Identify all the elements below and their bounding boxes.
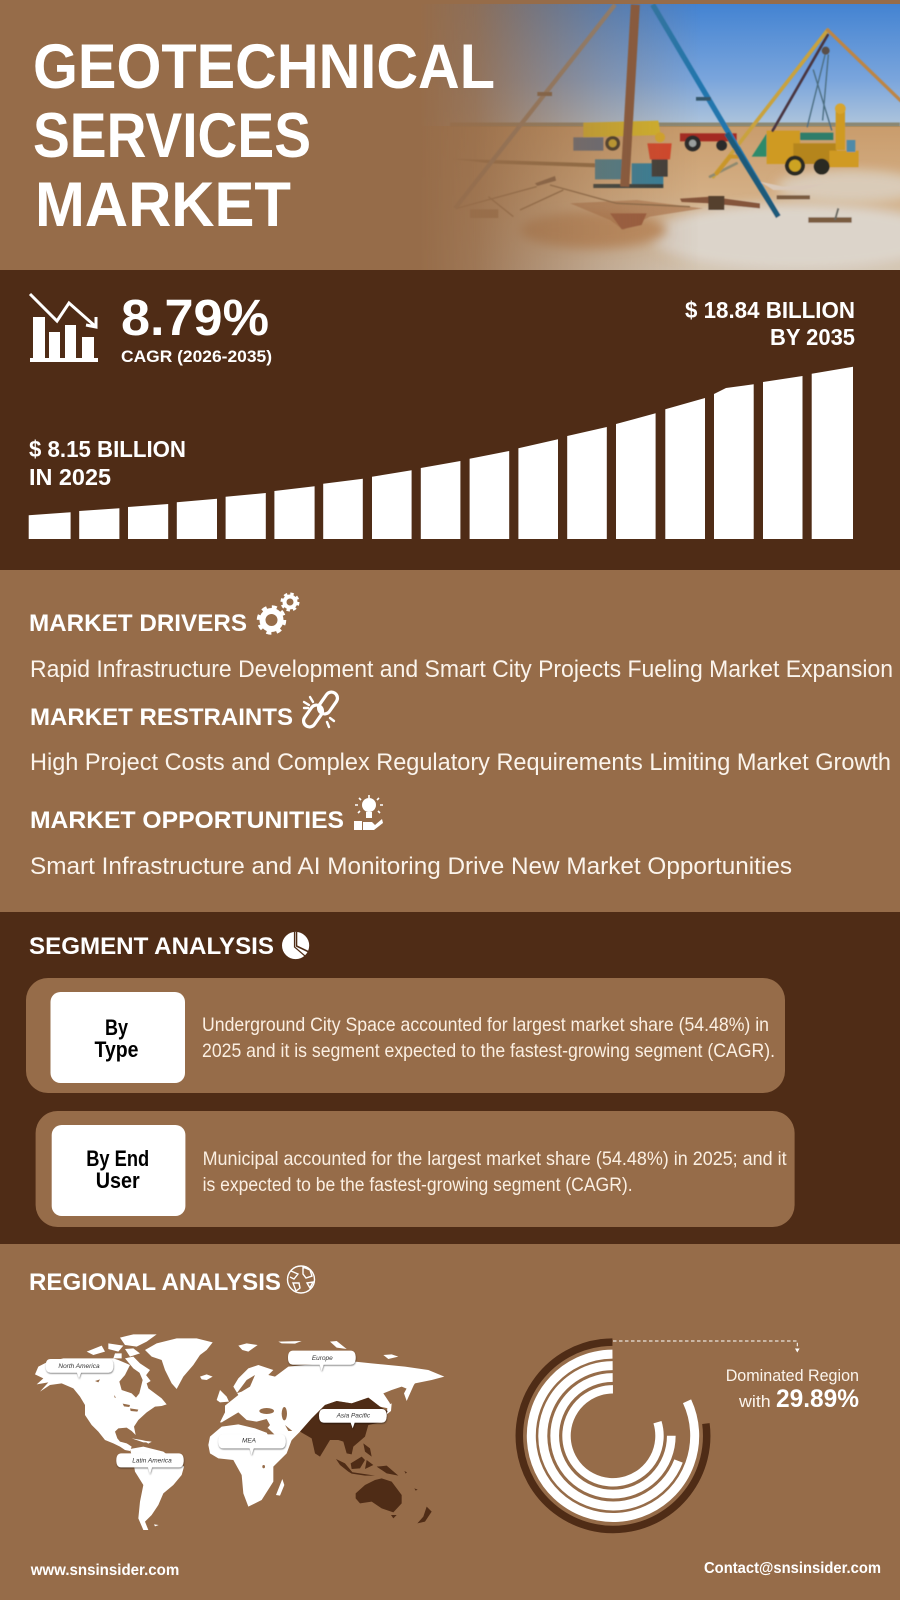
main poles [476, 4, 617, 183]
panel: segment analysis [0, 912, 900, 1244]
tractor [680, 133, 737, 141]
text: restraint: High Project Costs and Complex Regulatory Requirements Limiting Market Growth [30, 749, 891, 776]
2025 value [29, 436, 186, 490]
label box: by end user [52, 1125, 185, 1216]
title [33, 32, 495, 240]
callout: north america: North America [58, 1363, 100, 1370]
callout: dominated region: Dominated Region [726, 1366, 859, 1385]
label box: by end user: By End [86, 1146, 149, 1171]
icon: broken chain [301, 690, 340, 729]
callout: dominated region [726, 1366, 859, 1413]
2035 value [685, 297, 855, 350]
photo: drilling rigs on a dry site [400, 4, 900, 270]
callout: latin america [116, 1453, 184, 1474]
icon: growth chart [30, 294, 98, 362]
2035 value: BY 2035 [770, 324, 855, 350]
label box: by end user: User [96, 1168, 140, 1193]
pump [595, 159, 625, 179]
2025 value: IN 2025 [29, 464, 111, 490]
drilling machine [752, 133, 767, 157]
icon: idea in hand [354, 795, 383, 830]
panel: regional analysis [29, 1266, 881, 1579]
map: great lakes [95, 1379, 138, 1412]
map: inland seas [222, 1375, 292, 1468]
callout: mea: MEA [242, 1438, 256, 1445]
heading: market opportunities: MARKET OPPORTUNITIES [30, 807, 344, 834]
callout: latin america: Latin America [132, 1457, 172, 1464]
icon: pie chart [282, 932, 309, 959]
icon: gears [258, 594, 298, 633]
map: asia pacific highlighted [300, 1398, 432, 1523]
heading: regional analysis: REGIONAL ANALYSIS [29, 1269, 281, 1296]
title: MARKET [35, 170, 291, 240]
2035 value: $ 18.84 BILLION [685, 297, 855, 323]
text: by end user: is expected to be the fastest-growing segment (CAGR). [203, 1174, 633, 1196]
world map [35, 1334, 444, 1530]
tanker [583, 121, 661, 137]
callout: dominated region: with [738, 1392, 771, 1411]
title: SERVICES [33, 101, 311, 171]
heading: market drivers: MARKET DRIVERS [29, 610, 247, 637]
right tripod [710, 30, 900, 177]
callout: asia pacific: Asia Pacific [336, 1412, 371, 1419]
CAGR value: 8.79% [121, 289, 269, 346]
callout: europe: Europe [312, 1355, 333, 1362]
card: by end user [36, 1111, 795, 1227]
icon: globe [288, 1266, 314, 1293]
label box: by type: By [105, 1015, 129, 1040]
text: by end user [203, 1148, 787, 1196]
worker [652, 158, 668, 177]
text: opportunity: Smart Infrastructure and AI Monitoring Drive New Market Opportunities [30, 853, 792, 880]
CAGR label: CAGR (2026-2035) [121, 347, 272, 366]
heading: market restraints: MARKET RESTRAINTS [30, 704, 293, 731]
text: by type: Underground City Space accounted for largest market share (54.48%) in [202, 1014, 769, 1036]
label box: by type: Type [94, 1037, 138, 1062]
title: GEOTECHNICAL [33, 32, 495, 102]
callout: europe [288, 1351, 356, 1371]
card: by type [26, 978, 785, 1093]
arrow: dashed leader [613, 1341, 800, 1352]
callout: mea [218, 1434, 286, 1455]
map: europe africa and north asia [208, 1341, 444, 1507]
heading: segment analysis: SEGMENT ANALYSIS [29, 933, 274, 960]
label box: by type [50, 992, 185, 1083]
footer: website: www.snsinsider.com [30, 1562, 179, 1579]
callout: dominated region: 29.89% [776, 1385, 859, 1413]
text: by end user: Municipal accounted for the largest market share (54.48%) in 2025; and it [203, 1148, 787, 1170]
panel: market dynamics [29, 594, 893, 880]
panel: market size [0, 270, 900, 570]
text: by type: 2025 and it is segment expected to the fastest-growing segment (CAGR). [202, 1040, 775, 1062]
map: americas and greenland [35, 1334, 213, 1530]
footer: contact: Contact@snsinsider.com [704, 1560, 881, 1577]
callout: asia pacific [319, 1409, 387, 1428]
ground pipes [680, 197, 760, 208]
callout: north america [46, 1359, 113, 1378]
panel: header [33, 4, 900, 270]
text: by type [202, 1014, 775, 1062]
bar chart: market growth [29, 367, 853, 539]
2025 value: $ 8.15 BILLION [29, 436, 186, 462]
radial chart: regional share [504, 1327, 722, 1544]
